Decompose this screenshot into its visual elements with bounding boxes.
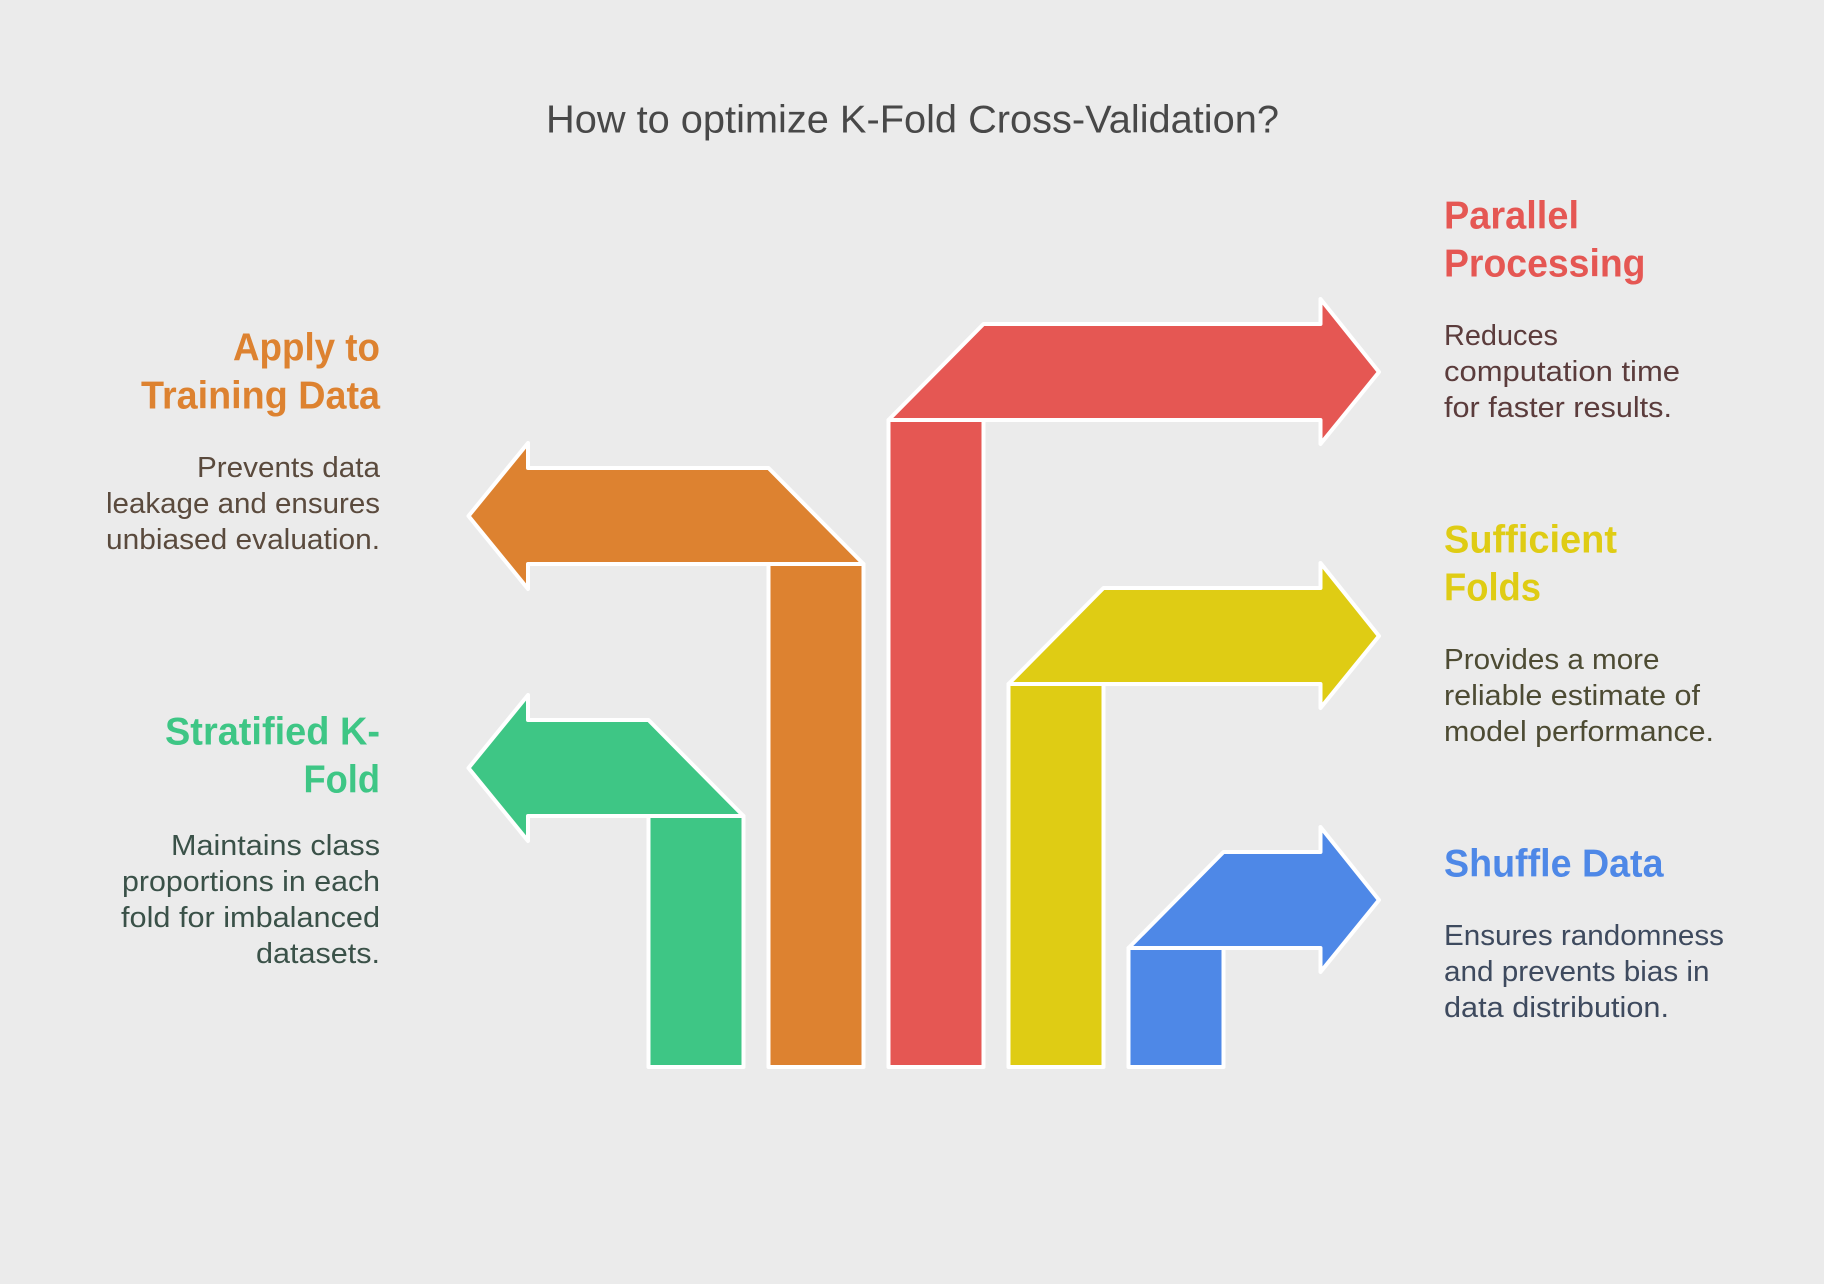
text: stratified k-fold description: Maintains class [171,830,380,862]
panel: sufficient folds [1008,518,1714,1067]
panel: shuffle data [1128,827,1724,1067]
heading: parallel processing [1444,194,1646,286]
panel: stratified k-fold [121,695,744,1067]
text: sufficient folds description [1444,644,1714,748]
heading: apply to training data: Training Data [141,374,380,418]
text: stratified k-fold description: proportions in each [122,866,380,898]
arrow: orange [468,443,864,1067]
text: sufficient folds description: model performance. [1444,716,1714,748]
panel: apply to training data [106,326,864,1067]
heading: sufficient folds: Folds [1444,566,1541,610]
text: shuffle data description: Ensures randomness [1444,920,1724,952]
text: sufficient folds description: Provides a more [1444,644,1660,676]
text: shuffle data description: data distribution. [1444,992,1669,1024]
heading: sufficient folds: Sufficient [1444,518,1617,562]
text: apply to training data description: leakage and ensures [106,488,380,520]
text: parallel processing description [1444,320,1680,424]
text: stratified k-fold description: datasets. [256,938,380,970]
title: How to optimize K-Fold Cross-Validation? [546,98,1279,142]
text: shuffle data description: and prevents bias in [1444,956,1710,988]
text: parallel processing description: Reduces [1444,320,1558,352]
text: apply to training data description: unbiased evaluation. [106,524,380,556]
heading: shuffle data: Shuffle Data [1444,842,1664,886]
text: stratified k-fold description [121,830,380,970]
text: shuffle data description [1444,920,1724,1024]
arrow: blue [1128,827,1379,1067]
heading: stratified k-fold: Stratified K- [165,710,380,754]
arrow: green [468,695,744,1067]
heading: sufficient folds [1444,518,1617,610]
text: apply to training data description [106,452,381,556]
heading: parallel processing: Processing [1444,242,1646,286]
heading: apply to training data: Apply to [233,326,380,370]
heading: parallel processing: Parallel [1444,194,1579,238]
heading: apply to training data [141,326,380,418]
text: parallel processing description: for faster results. [1444,392,1672,424]
text: parallel processing description: computation time [1444,356,1680,388]
heading: stratified k-fold: Fold [304,758,380,802]
text: sufficient folds description: reliable estimate of [1444,680,1701,712]
text: stratified k-fold description: fold for imbalanced [121,902,380,934]
arrow: red [888,299,1379,1067]
panel: parallel processing [888,194,1680,1067]
arrow: yellow [1008,563,1379,1067]
text: apply to training data description: Prevents data [197,452,381,484]
heading: stratified k-fold [165,710,380,802]
